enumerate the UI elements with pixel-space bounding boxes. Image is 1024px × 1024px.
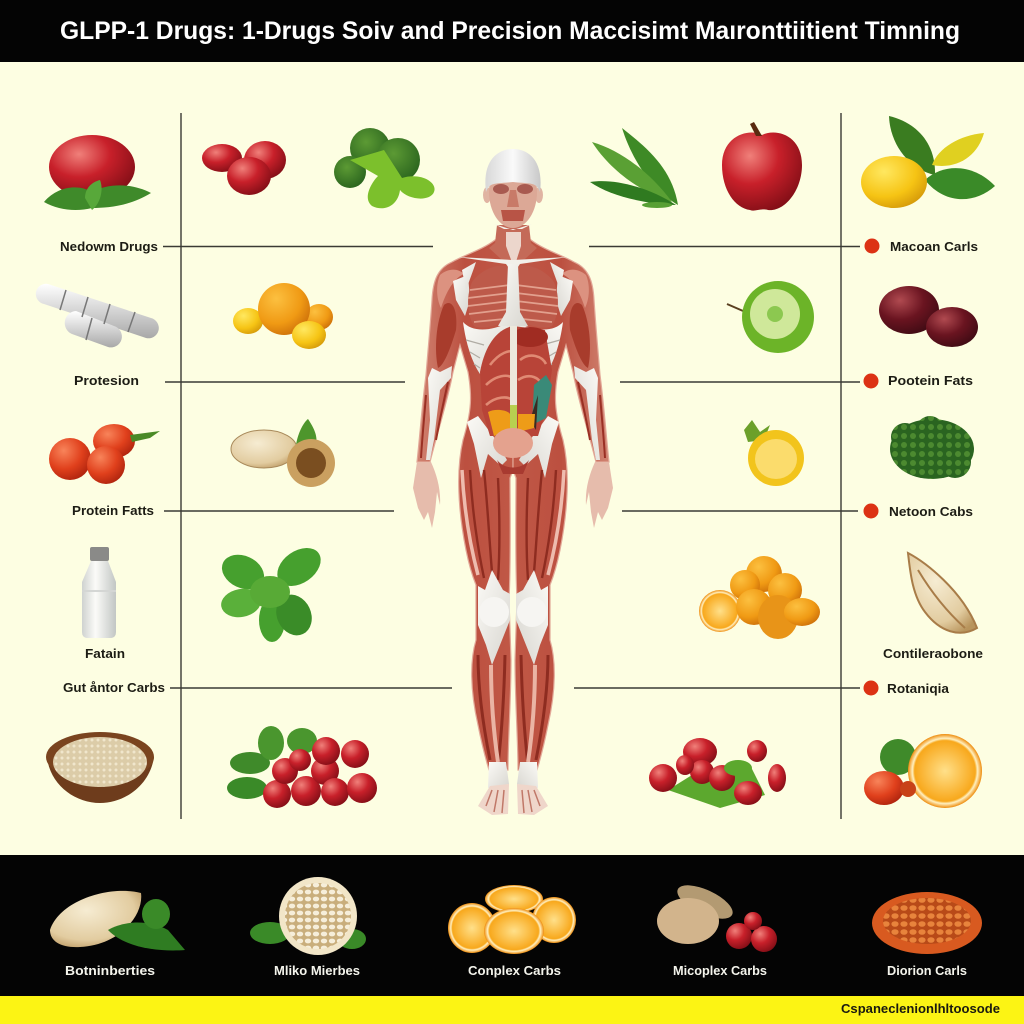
anatomy figure <box>413 149 613 815</box>
icon: lemon half <box>744 420 804 486</box>
vertical dividers and connector lines <box>163 113 860 819</box>
icon: green basil <box>216 540 328 642</box>
footer label: Botninberties <box>65 964 155 978</box>
title bar <box>0 0 1024 62</box>
footer label: Mliko Mierbes <box>274 964 360 978</box>
label: Gut åntor Carbs <box>63 681 165 695</box>
label: Pootein Fats <box>888 374 973 388</box>
icon: lemon with leaves <box>861 116 995 208</box>
footer label: Micoplex Carbs <box>673 964 767 978</box>
icon: nuts <box>231 419 335 487</box>
icon: green broccoli <box>890 416 974 479</box>
icon: strawberries with greens <box>649 738 786 808</box>
icon: red apple <box>722 122 802 211</box>
footer item: white round slice <box>250 877 366 978</box>
icon: red fruits with leaves <box>227 726 377 808</box>
row 4 food <box>82 540 977 642</box>
row 2 food <box>36 281 978 353</box>
collarbones <box>458 257 568 274</box>
footer label: Conplex Carbs <box>468 964 561 978</box>
icon: bowl of grain <box>46 732 154 803</box>
marker <box>864 504 878 518</box>
icon: red berries <box>202 141 286 195</box>
marker <box>864 374 878 388</box>
icon: green apple slice <box>727 281 814 353</box>
footer item: almond with leaf <box>50 891 185 978</box>
label: Protesion <box>74 374 139 388</box>
yellow footer strip <box>0 996 1024 1024</box>
head <box>483 149 543 270</box>
icon: red apple with basil <box>44 135 151 210</box>
footer item: orange bowl <box>872 892 982 978</box>
label: Macoan Carls <box>890 240 978 254</box>
icon: orange slice and tomato <box>864 734 982 808</box>
abdominal organs <box>480 326 552 474</box>
footer band <box>0 855 1024 996</box>
icon: white pills <box>36 284 159 347</box>
row labels left <box>60 240 165 695</box>
label: Protein Fatts <box>72 504 154 518</box>
footer label: Diorion Carls <box>887 964 967 978</box>
row 3 food <box>49 416 974 487</box>
row 1 left <box>44 128 435 210</box>
icon: milk bottle <box>82 547 116 638</box>
title: GLPP-1 Drugs: 1-Drugs Soiv and Precision Maccisimt Maıronttiitient Timning <box>60 17 960 45</box>
label: Nedowm Drugs <box>60 240 158 254</box>
icon: seed pod <box>908 553 977 633</box>
icon: dark red berries <box>879 286 978 347</box>
label: Fatain <box>85 647 125 661</box>
marker <box>864 238 880 254</box>
row 5 food <box>46 726 982 808</box>
row labels right with markers <box>864 238 983 696</box>
footer item: nuts and berries <box>657 878 777 978</box>
row 1 right <box>590 116 995 211</box>
icon: broccoli <box>334 128 435 208</box>
credit: Cspaneclenionlhltoosode <box>841 1001 1000 1016</box>
label: Contileraobone <box>883 647 983 661</box>
icon: green blades <box>590 128 678 208</box>
label: Rotaniqia <box>887 682 950 696</box>
icon: orange fruits <box>233 283 333 349</box>
icon: tomatoes <box>49 424 160 484</box>
sternum and spine <box>498 264 528 326</box>
label: Netoon Cabs <box>889 505 973 519</box>
marker <box>864 680 878 696</box>
icon: orange pile <box>699 556 820 639</box>
footer item: orange slices <box>448 885 576 978</box>
